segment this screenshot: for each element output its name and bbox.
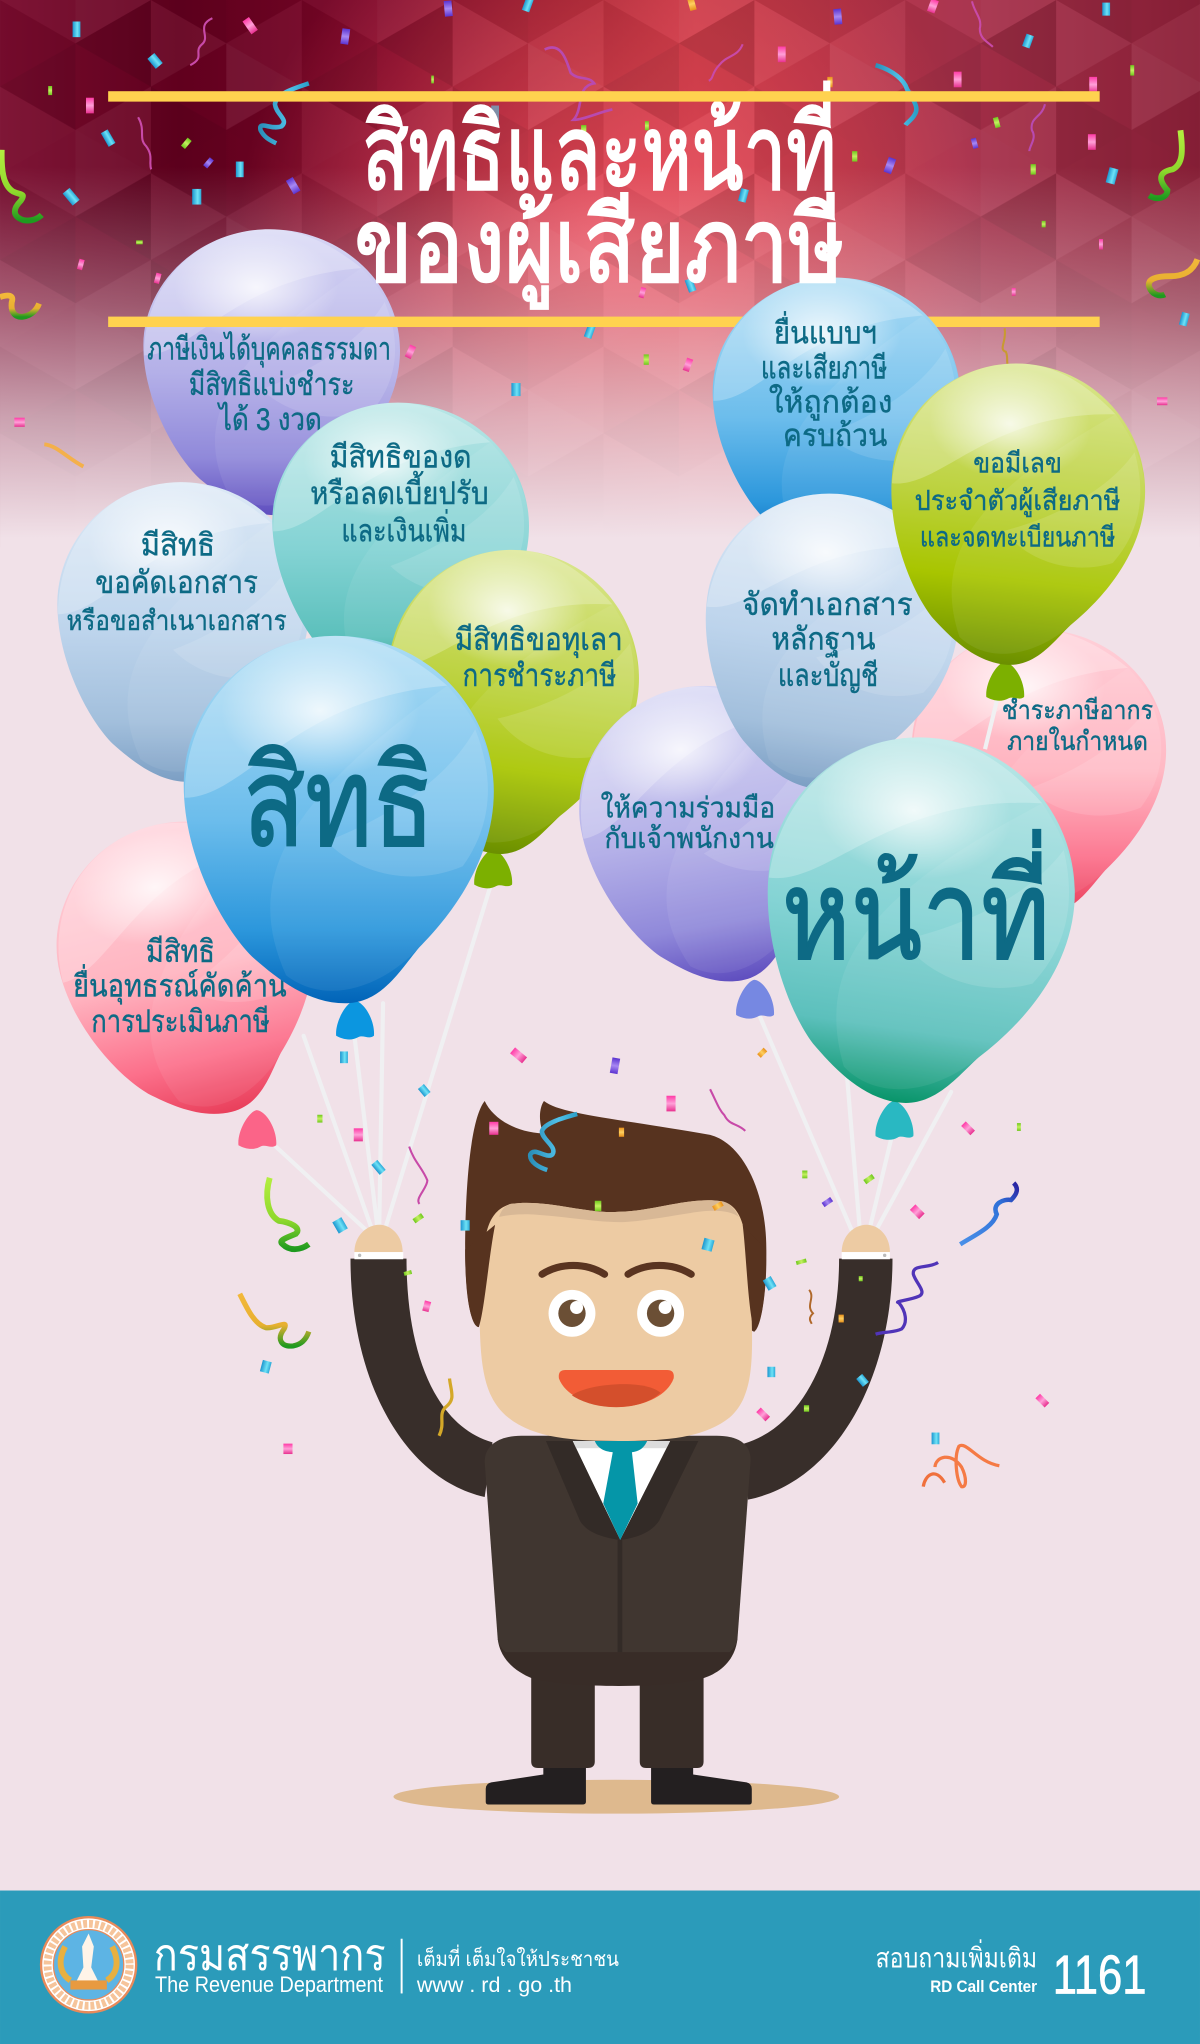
balloon strings (265, 879, 951, 1231)
mouth (559, 1370, 674, 1407)
balloon: waive penalty (272, 403, 529, 695)
balloon: duties heading: หน้าที่ (782, 829, 1050, 985)
slogan and website: www . rd . go .th (416, 1974, 572, 1997)
balloon: pink pay on time: ชำระภาษีอากร (1002, 695, 1153, 725)
slogan and website: เต็มที่ เต็มใจให้ประชาชน (417, 1944, 619, 1971)
logo seal (41, 1917, 136, 2012)
balloon: extension: การชำระภาษี (463, 658, 616, 693)
balloon: waive penalty: มีสิทธิของด (330, 440, 472, 475)
eyes (549, 1290, 684, 1337)
hands and cuffs (354, 1225, 890, 1259)
yellow lower bar (108, 317, 1100, 327)
call center (876, 1939, 1147, 2005)
jacket (485, 1436, 751, 1652)
department name: กรมสรรพากร (154, 1931, 386, 1980)
balloon: file returns: ครบถ้วน (783, 418, 887, 453)
right arm (744, 1259, 893, 1500)
jacket seam (618, 1540, 622, 1652)
shirt collar (573, 1441, 670, 1540)
hair (465, 1101, 766, 1332)
balloon: waive penalty: หรือลดเบี้ยปรับ (310, 470, 489, 511)
jacket hem (498, 1639, 737, 1686)
character: businessman (350, 1101, 893, 1814)
face (479, 1200, 752, 1441)
lower streamers (240, 1089, 1017, 1487)
balloon: tax id: ประจำตัวผู้เสียภาษี (915, 485, 1121, 517)
balloon: appeal: การประเมินภาษี (91, 1004, 270, 1039)
balloon: request documents: หรือขอสำเนาเอกสาร (66, 605, 287, 636)
balloon: request documents: มีสิทธิ (141, 528, 215, 563)
balloon: cooperate (560, 665, 862, 1019)
balloon: extension: มีสิทธิขอทุเลา (455, 622, 623, 659)
balloon: left purple installment right (143, 229, 400, 515)
balloon: cooperate: กับเจ้าพนักงาน (605, 823, 774, 855)
balloon: keep records: และบัญชี (778, 658, 878, 693)
footer band (0, 1891, 1200, 2044)
left arm (350, 1259, 493, 1497)
necktie (595, 1441, 647, 1540)
text: purple balloon: มีสิทธิแบ่งชำระ (189, 367, 354, 402)
title: ของผู้เสียภาษี (354, 188, 844, 309)
legs (531, 1668, 704, 1768)
balloon: keep records: หลักฐาน (771, 621, 876, 657)
lower confetti (260, 1047, 1049, 1454)
call center: RD Call Center (930, 1977, 1037, 1996)
balloon: pink pay on time (912, 629, 1166, 914)
balloon: appeal: ยื่นอุทธรณ์คัดค้าน (73, 965, 287, 1006)
balloon: tax id (874, 351, 1158, 701)
forehead shadow (499, 1200, 739, 1222)
balloon: file returns: ยื่นแบบฯ (774, 311, 877, 350)
balloon: keep records (683, 478, 974, 805)
call center: สอบถามเพิ่มเติม (876, 1939, 1037, 1973)
balloon: file returns (713, 278, 960, 557)
balloon: tax id: และจดทะเบียนภาษี (920, 522, 1115, 553)
yellow top bar (108, 91, 1100, 102)
shoes (486, 1768, 752, 1805)
balloon: rights heading (184, 636, 494, 1039)
balloon: cooperate: ให้ความร่วมมือ (601, 792, 775, 825)
footer divider (401, 1939, 403, 1993)
call center: 1161 (1053, 1943, 1147, 2005)
lapels (546, 1441, 698, 1540)
balloon: duties heading (739, 718, 1095, 1140)
hair sideburns (465, 1225, 766, 1332)
balloon: appeal (31, 794, 352, 1149)
upper streamers (0, 1, 1197, 466)
balloon: file returns: และเสียภาษี (761, 350, 887, 385)
balloon: file returns: ให้ถูกต้อง (769, 383, 893, 420)
balloon: tax id: ขอมีเลข (973, 447, 1062, 478)
balloon: appeal: มีสิทธิ (146, 934, 215, 969)
balloon: request documents (57, 482, 309, 782)
department name (154, 1931, 386, 1997)
balloon: pink pay on time: ภายในกำหนด (1007, 726, 1148, 756)
balloon: waive penalty: และเงินเพิ่ม (341, 509, 466, 548)
text: purple balloon (147, 331, 391, 437)
slogan and website (416, 1944, 619, 1997)
text: purple balloon: ภาษีเงินได้บุคคลธรรมดา (147, 331, 391, 369)
text: purple balloon: ได้ 3 งวด (216, 401, 322, 437)
balloon: keep records: จัดทำเอกสาร (742, 587, 913, 622)
department name: The Revenue Department (155, 1972, 383, 1997)
upper confetti (14, 0, 1190, 427)
balloon: rights heading: สิทธิ (243, 733, 435, 873)
title: สิทธิและหน้าที่ (362, 81, 836, 212)
balloon: extension (364, 534, 656, 888)
title (354, 81, 844, 309)
eyebrows (542, 1265, 691, 1274)
ground shadow (393, 1780, 839, 1814)
balloon: request documents: ขอคัดเอกสาร (95, 565, 258, 600)
